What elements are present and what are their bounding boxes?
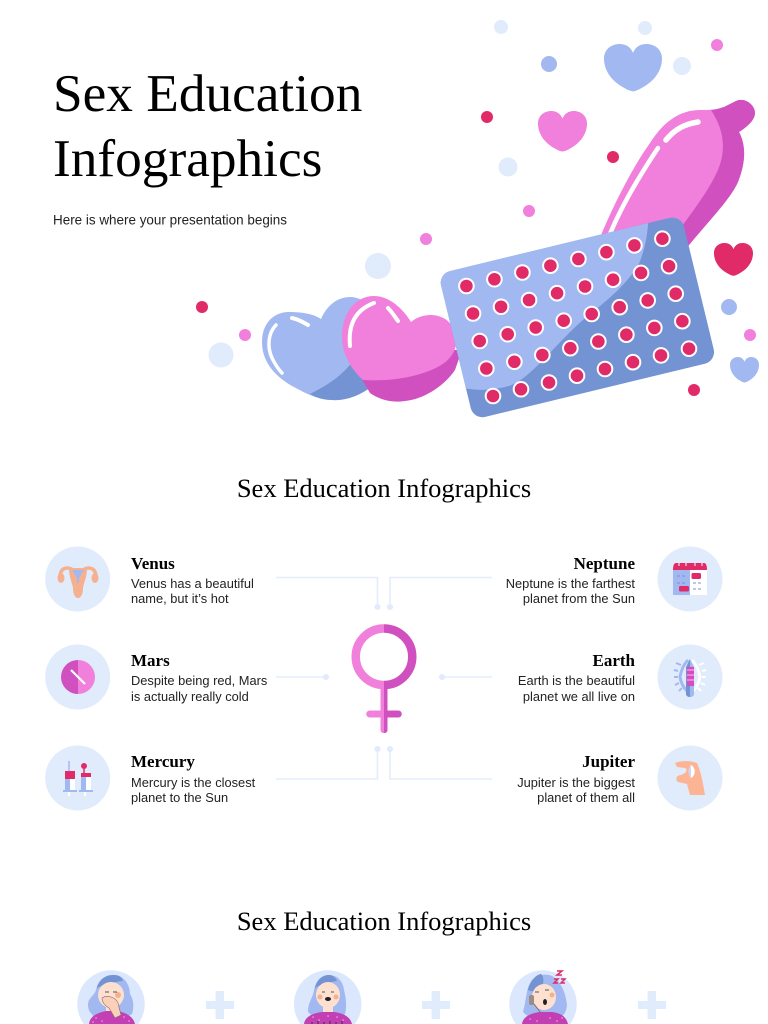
text: Despite being red, Mars [131, 673, 267, 688]
blue 3D heart [262, 297, 380, 400]
item: Earth [518, 644, 722, 710]
heading: Mercury [131, 752, 195, 771]
hero illustration [196, 20, 759, 420]
text [518, 673, 635, 704]
text: planet to the Sun [131, 790, 228, 805]
item: Neptune [506, 546, 722, 612]
icon: ribbed condom [658, 644, 722, 710]
text [131, 673, 267, 704]
icon: calendar [658, 546, 722, 612]
text: Earth is the beautiful [518, 673, 635, 688]
text: Venus has a beautiful [131, 576, 254, 591]
icon: plus [422, 991, 450, 1019]
text: Jupiter is the biggest [517, 775, 635, 790]
text: Neptune is the farthest [506, 576, 635, 591]
connector lines [276, 578, 492, 779]
icon: female symbol [356, 628, 412, 733]
title: Sex Education [53, 64, 362, 123]
text: name, but it’s hot [131, 591, 229, 606]
heading: Neptune [574, 554, 635, 573]
title [53, 64, 362, 188]
text [506, 576, 635, 606]
pink 3D heart [342, 296, 462, 402]
heading: Mars [131, 651, 170, 670]
icon: plus [206, 991, 234, 1019]
item: Jupiter [517, 746, 722, 810]
text: Mercury is the closest [131, 775, 256, 790]
heading: Earth [592, 651, 636, 670]
pill pack [430, 210, 717, 420]
text: planet of them all [537, 790, 635, 805]
avatar: woman surprised [294, 970, 361, 1024]
title: Infographics [53, 129, 322, 188]
avatar: woman sleeping [509, 970, 577, 1024]
text: planet from the Sun [523, 591, 635, 606]
subtitle: Here is where your presentation begins [53, 212, 287, 228]
item: Venus [45, 546, 254, 612]
condom [599, 100, 755, 250]
icon: blue heart tiny [730, 357, 759, 382]
text [131, 775, 256, 805]
text [131, 576, 254, 606]
icon: hand holding pill [658, 746, 722, 810]
confetti dots [196, 20, 756, 396]
section heading 1: Sex Education Infographics [237, 473, 531, 503]
heading: Venus [131, 554, 175, 573]
section heading 2: Sex Education Infographics [237, 906, 531, 936]
text: planet we all live on [523, 689, 635, 704]
icon: red heart [714, 243, 753, 276]
item: Mars [45, 644, 267, 710]
text: is actually really cold [131, 689, 249, 704]
heading: Jupiter [582, 752, 635, 771]
avatar: woman covering mouth [77, 970, 145, 1024]
text [517, 775, 635, 805]
item: Mercury [45, 746, 256, 810]
icon: pink heart small [538, 111, 587, 151]
icon: plus [638, 991, 666, 1019]
icon: blue heart small top [604, 44, 662, 91]
icon: pill [45, 644, 110, 710]
icon: syringes [45, 746, 110, 810]
icon: uterus [45, 546, 110, 612]
